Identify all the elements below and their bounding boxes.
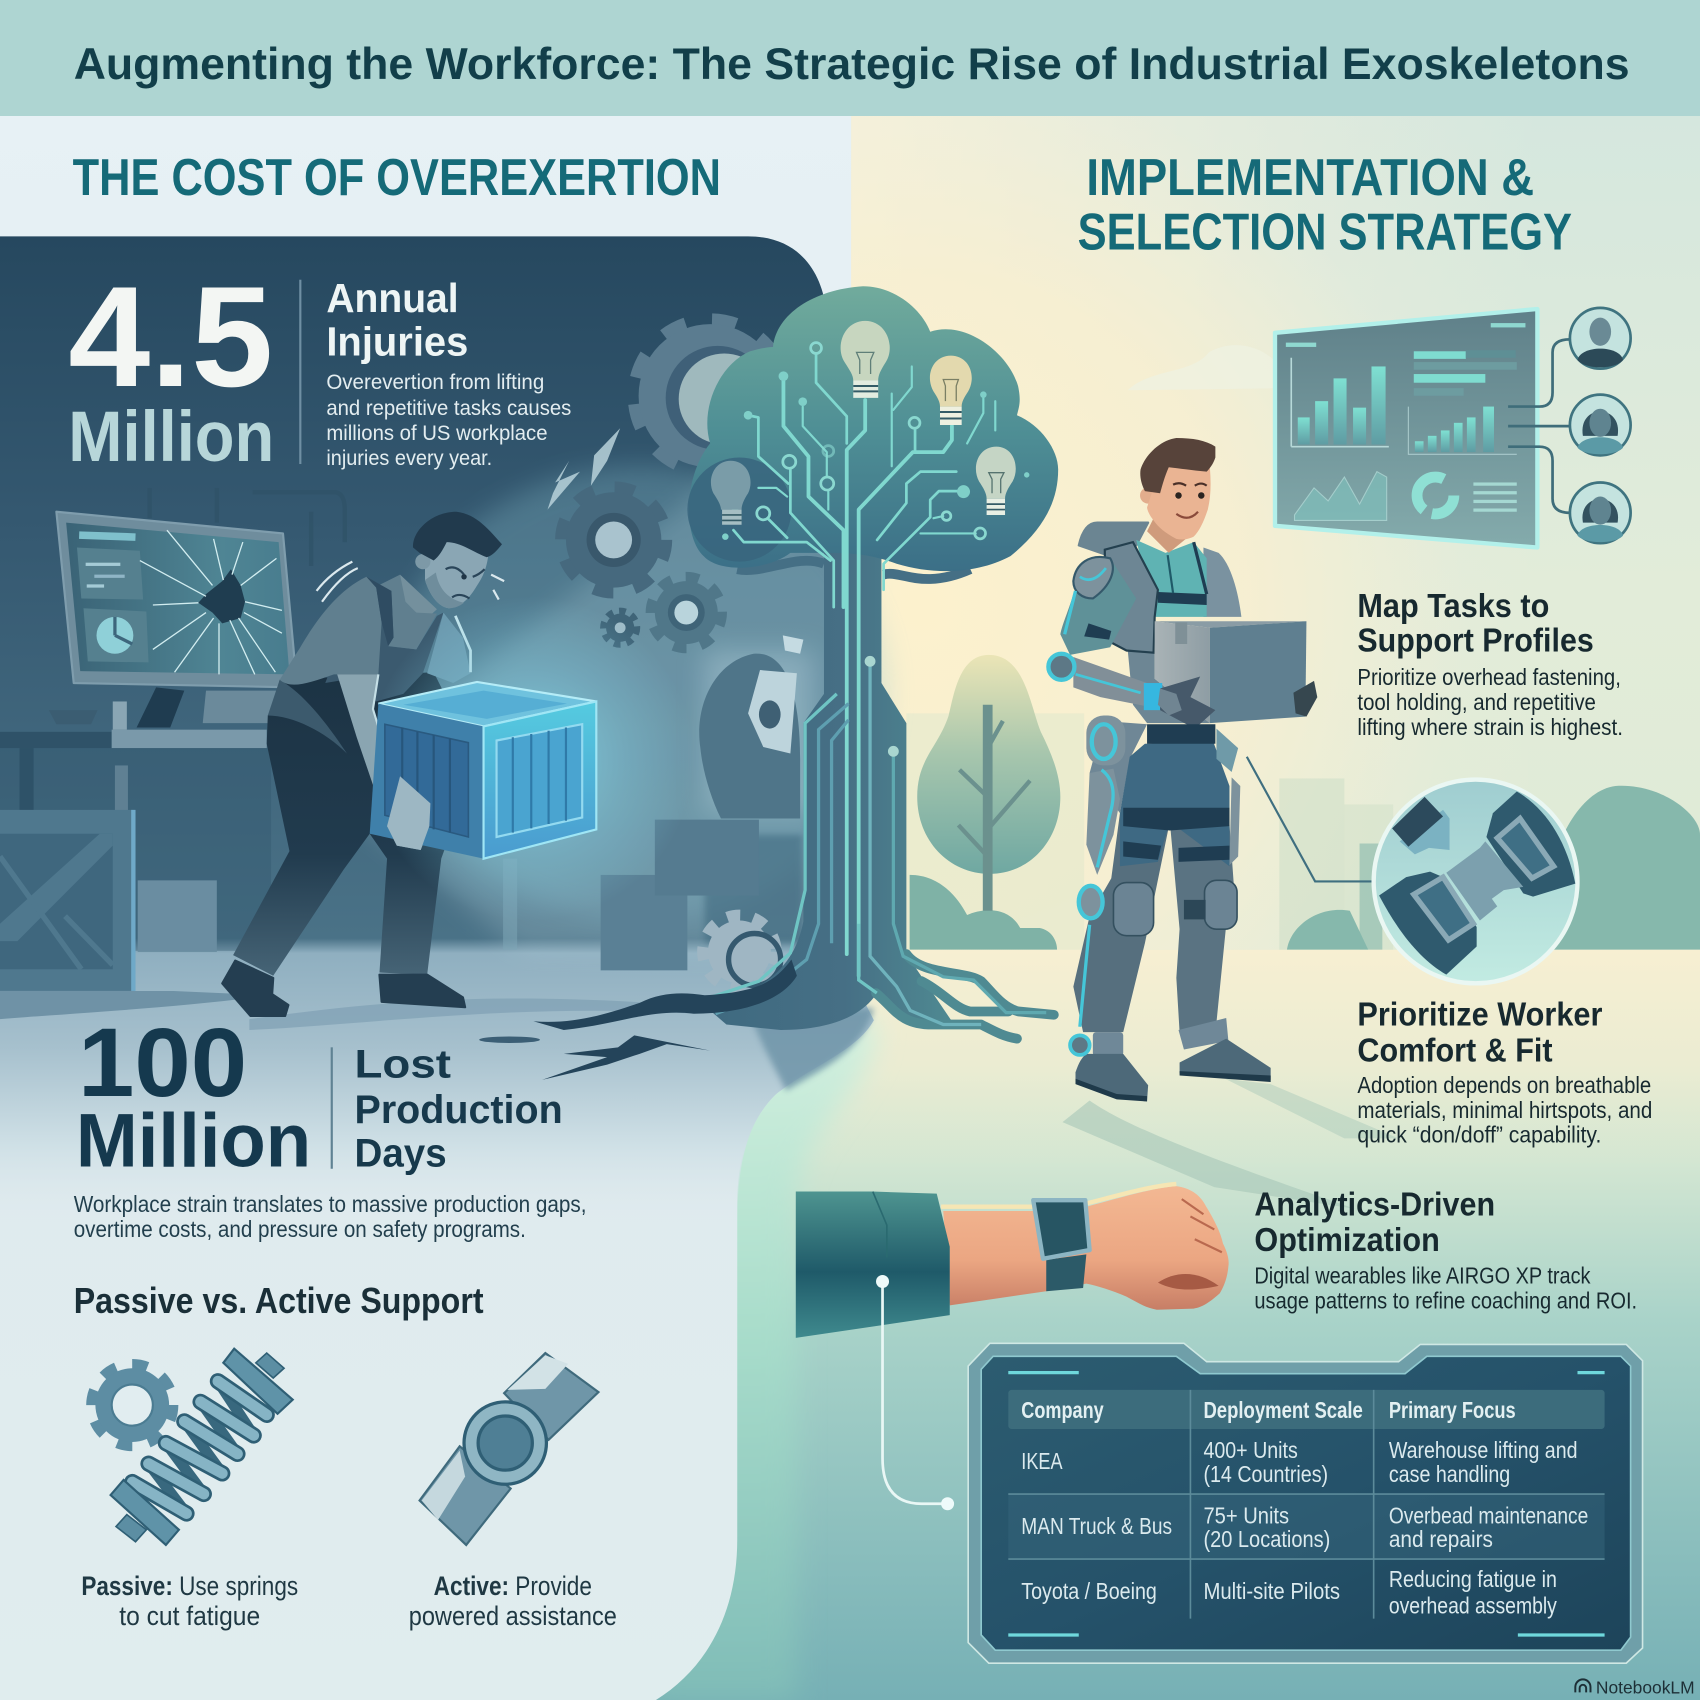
- stat: 100 million lost production days: Million: [76, 1099, 311, 1184]
- text block: analytics: [1254, 1186, 1637, 1314]
- text block: worker comfort: [1357, 997, 1652, 1148]
- stat: 4.5 million annual injuries: 4.5: [68, 257, 273, 417]
- caption: passive: Passive: Use springs: [81, 1570, 298, 1601]
- illustration: analytics dashboard: [1275, 309, 1537, 548]
- text block: map tasks: Support Profiles: [1357, 623, 1594, 660]
- illustration: glowing crate: [369, 596, 694, 922]
- header band: [0, 0, 1700, 116]
- text block: analytics: Digital wearables like AIRGO XP track: [1254, 1263, 1591, 1289]
- text block: map tasks: [1357, 588, 1623, 740]
- table rows: [1021, 1437, 1588, 1618]
- table rows: overhead assembly: [1389, 1592, 1557, 1618]
- table rows: Multi-site Pilots: [1203, 1578, 1340, 1604]
- table header row: Deployment Scale: [1203, 1397, 1363, 1423]
- illustration: wrist with wearable: [796, 1184, 1229, 1338]
- logo: NotebookLM: NotebookLM: [1596, 1677, 1695, 1697]
- text block: map tasks: lifting where strain is highest.: [1357, 714, 1623, 740]
- stat: 100 million lost production days: 100: [78, 1008, 247, 1117]
- table rows: case handling: [1389, 1461, 1510, 1487]
- panel: left background: [0, 116, 874, 1700]
- heading: cost of overexertion: THE COST OF OVEREXERTION: [73, 149, 721, 207]
- icon: active powered joint: [420, 1353, 598, 1545]
- icon: connector from wearable to table: [876, 1275, 954, 1510]
- table rows: 400+ Units: [1203, 1437, 1298, 1463]
- caption: active: [409, 1570, 617, 1631]
- stat: 4.5 million annual injuries: Injuries: [326, 319, 468, 365]
- text block: map tasks: Map Tasks to: [1357, 588, 1549, 625]
- icon: buckle callout: [1247, 757, 1577, 983]
- table header row: [1021, 1397, 1516, 1423]
- icon: medium gear: [563, 489, 665, 591]
- stat: 4.5 million annual injuries: millions of US workplace: [326, 420, 548, 445]
- icon: avatars: [1570, 308, 1631, 543]
- stat: 100 million lost production days: Days: [355, 1132, 447, 1176]
- icon: large gear: [636, 322, 784, 469]
- illustration: small background tree: [917, 655, 1060, 911]
- scene: broken gear and debris: [548, 428, 803, 988]
- text block: worker comfort: quick “don/doff” capability.: [1357, 1122, 1601, 1148]
- icon: connector lines: [1508, 339, 1570, 513]
- text block: analytics: usage patterns to refine coaching and ROI.: [1254, 1288, 1637, 1314]
- stat: 4.5 million annual injuries: Million: [68, 397, 274, 477]
- illustration: circuit tree: [479, 286, 1058, 1080]
- icon: light bulbs: [711, 321, 1016, 525]
- illustration: tired worker: [222, 512, 504, 1016]
- table rows: and repairs: [1389, 1526, 1493, 1552]
- heading: implementation and selection strategy: SELECTION STRATEGY: [1078, 203, 1572, 261]
- text block: analytics: Optimization: [1254, 1222, 1440, 1259]
- text block: analytics: Analytics-Driven: [1254, 1186, 1495, 1223]
- table rows: Overbead maintenance: [1389, 1502, 1588, 1528]
- stat: 4.5 million annual injuries: and repetitive tasks causes: [326, 395, 572, 420]
- icon: tiny gear: [604, 611, 636, 644]
- table rows: Toyota / Boeing: [1021, 1578, 1157, 1604]
- caption: passive: [81, 1570, 298, 1631]
- scene: wall fittings, desk and boxes: [0, 488, 759, 991]
- heading: passive vs active support: Passive vs. Active Support: [74, 1281, 484, 1321]
- text block: worker comfort: Adoption depends on breathable: [1357, 1072, 1651, 1098]
- panel: dark illustration background: [0, 236, 889, 1225]
- stat: 100 million lost production days: [74, 1008, 587, 1242]
- stat: 100 million lost production days: Lost: [355, 1043, 451, 1087]
- text block: worker comfort: Comfort & Fit: [1357, 1032, 1553, 1069]
- stat: 4.5 million annual injuries: injuries every year.: [326, 445, 492, 470]
- heading: implementation and selection strategy: [1078, 149, 1572, 261]
- stat: 100 million lost production days: Workplace strain translates to massive production gaps,: [74, 1191, 587, 1217]
- text block: worker comfort: Prioritize Worker: [1357, 997, 1602, 1034]
- table header row: Company: [1021, 1397, 1104, 1423]
- stat: 100 million lost production days: overtime costs, and pressure on safety programs.: [74, 1216, 526, 1242]
- text block: worker comfort: materials, minimal hirtspots, and: [1357, 1097, 1652, 1123]
- table rows: IKEA: [1021, 1448, 1063, 1474]
- stat: 4.5 million annual injuries: Annual: [326, 275, 459, 321]
- table rows: MAN Truck & Bus: [1021, 1513, 1172, 1539]
- text block: map tasks: tool holding, and repetitive: [1357, 689, 1596, 715]
- table rows: 75+ Units: [1203, 1502, 1289, 1528]
- table rows: Reducing fatigue in: [1389, 1566, 1557, 1592]
- table header row: Primary Focus: [1389, 1397, 1516, 1423]
- table rows: Warehouse lifting and: [1389, 1437, 1577, 1463]
- title: Augmenting the Workforce: The Strategic Rise of Industrial Exoskeletons: [74, 40, 1630, 89]
- stat: 100 million lost production days: Production: [355, 1088, 563, 1132]
- stat: 4.5 million annual injuries: [68, 257, 572, 477]
- caption: active: Active: Provide: [434, 1570, 592, 1601]
- icon: broken monitor: [56, 512, 297, 727]
- table rows: (14 Countries): [1203, 1461, 1328, 1487]
- panel: deployment table: [968, 1343, 1643, 1663]
- caption: active: powered assistance: [409, 1600, 617, 1631]
- text block: map tasks: Prioritize overhead fastening,: [1357, 664, 1621, 690]
- illustration: worker in exoskeleton: [1048, 438, 1399, 1209]
- table rows: (20 Locations): [1203, 1526, 1330, 1552]
- heading: implementation and selection strategy: IMPLEMENTATION &: [1086, 149, 1534, 207]
- stat: 4.5 million annual injuries: Overevertion from lifting: [326, 369, 544, 394]
- icon: passive spring: [92, 1349, 293, 1545]
- caption: passive: to cut fatigue: [119, 1600, 260, 1631]
- icon: small gear: [652, 578, 721, 647]
